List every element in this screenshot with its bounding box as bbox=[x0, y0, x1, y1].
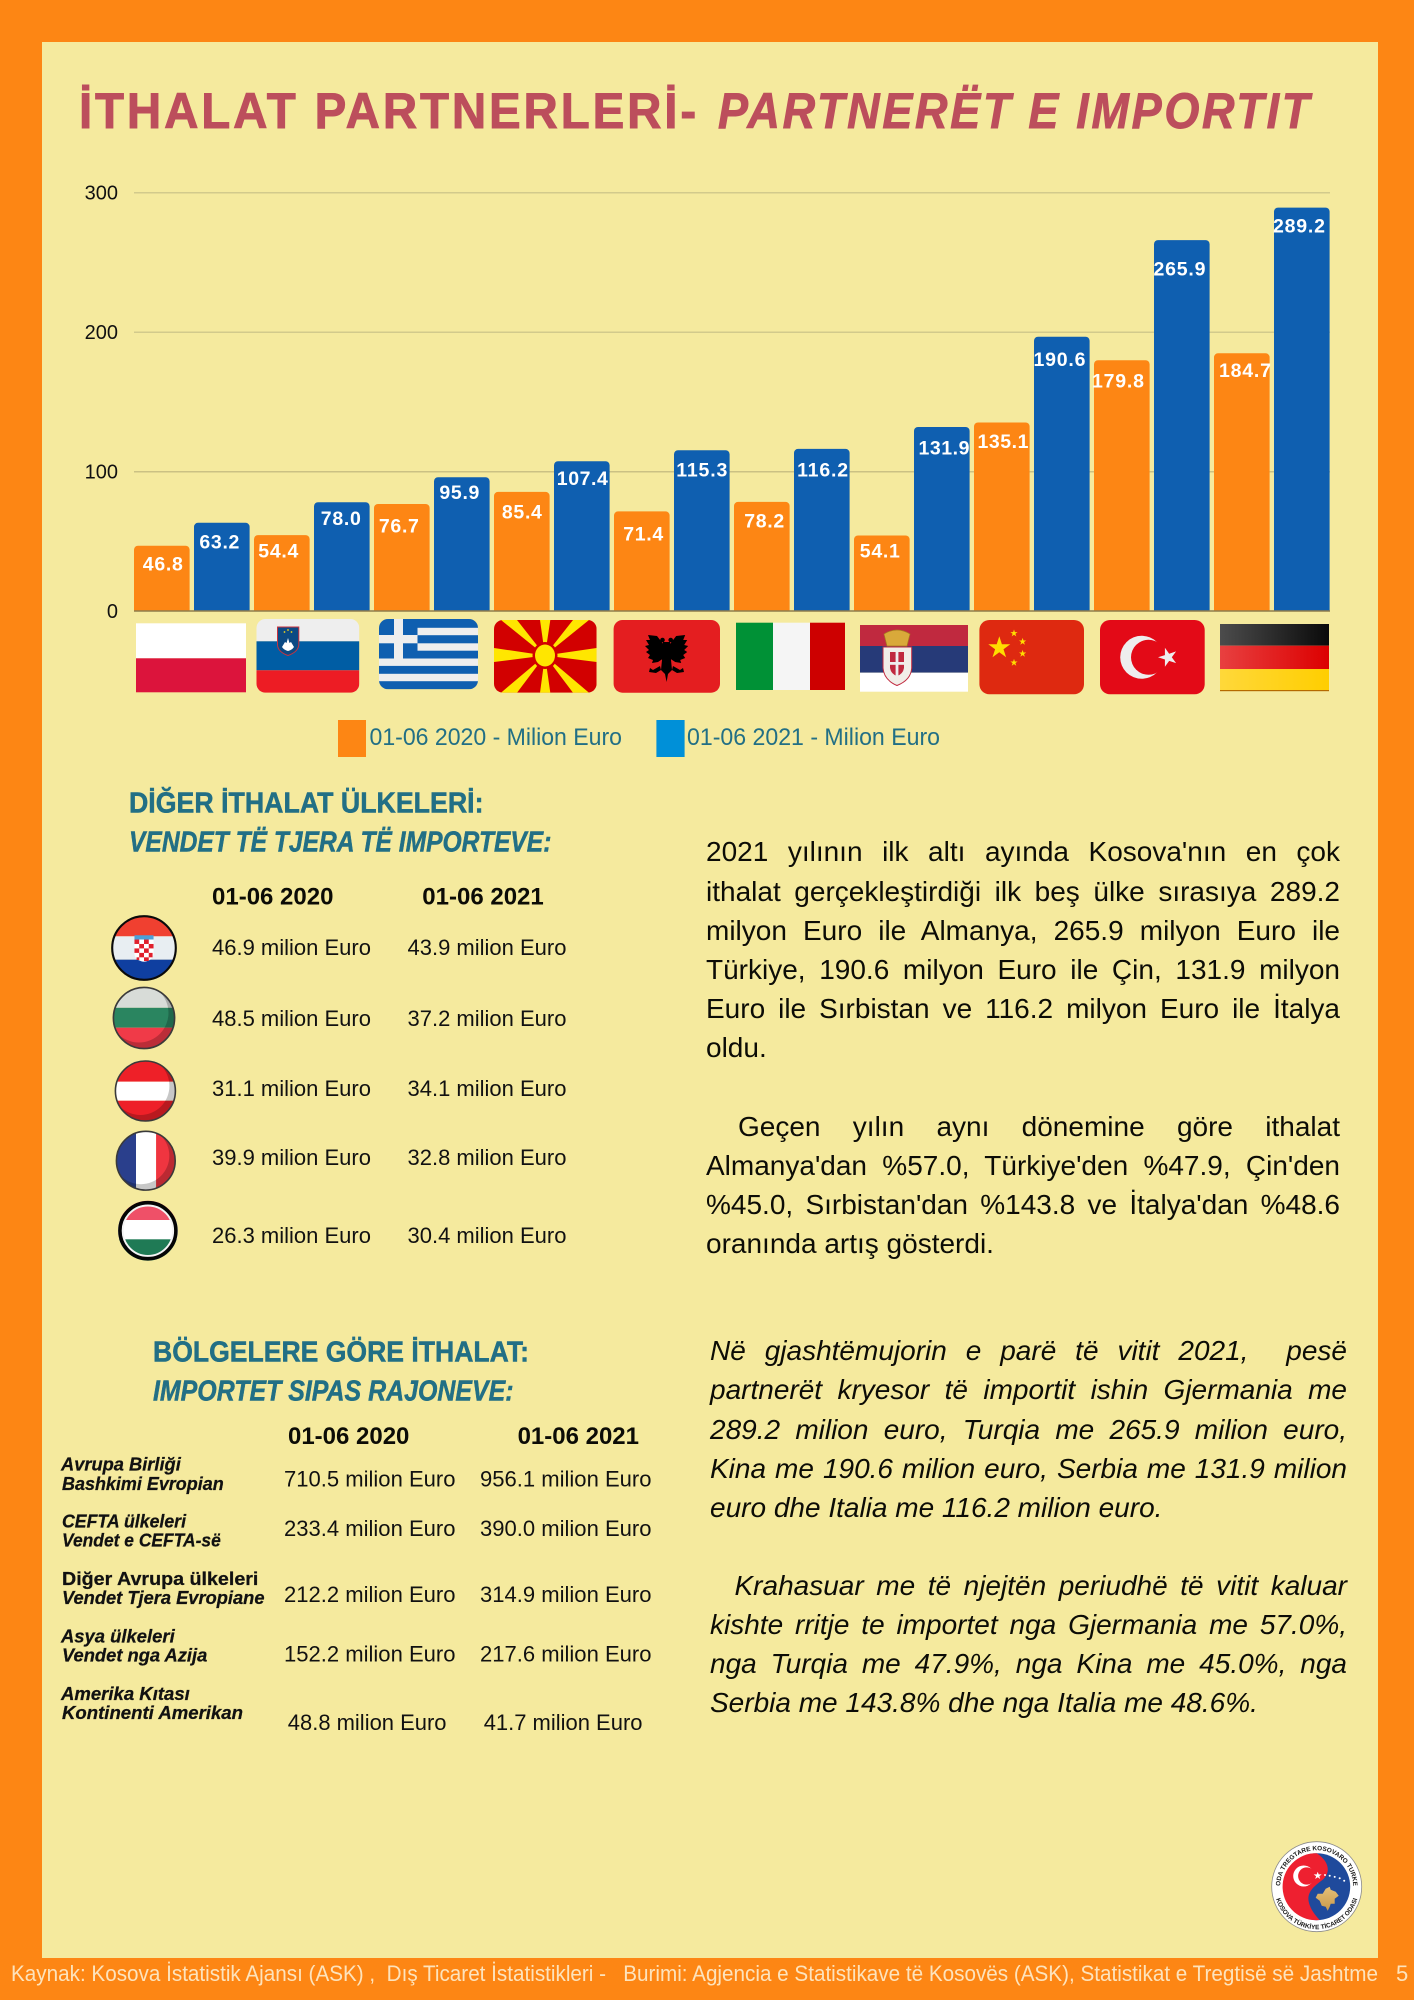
y axis labels: 200 bbox=[85, 322, 118, 344]
icon: chamber of commerce logo: ODA TREGTARE KOSOVARO TURKE bbox=[1276, 1846, 1358, 1886]
icon: flag Serbia bbox=[860, 625, 968, 692]
legend bbox=[338, 720, 940, 757]
row: Hungary bbox=[212, 1223, 566, 1248]
row: Austria bbox=[212, 1076, 566, 1101]
icon: flag France bbox=[112, 1127, 176, 1190]
text block: Albanian summary paragraph 1: 289.2 milion euro, Turqia me 265.9 milion euro, bbox=[710, 1414, 1347, 1445]
text block: Turkish summary paragraph 2 bbox=[706, 1111, 1340, 1259]
bars and value labels: 107.4 bbox=[557, 468, 608, 490]
icon: flag Croatia bbox=[112, 916, 176, 980]
row: Americas: Kontinenti Amerikan bbox=[62, 1702, 243, 1723]
y axis labels: 100 bbox=[85, 462, 118, 484]
text block: Turkish summary paragraph 2: %45.0, Sırbistan'dan %143.8 ve İtalya'dan %48.6 bbox=[706, 1189, 1340, 1220]
y axis labels: 300 bbox=[85, 183, 118, 205]
icon: flag Bulgaria bbox=[109, 983, 175, 1049]
bars and value labels: 190.6 bbox=[1034, 349, 1086, 371]
row: European Union bbox=[60, 1454, 652, 1494]
title bbox=[79, 83, 1313, 139]
row: European Union: 710.5 milion Euro bbox=[284, 1467, 456, 1492]
text block: Albanian summary paragraph 2: kishte rritje te importet nga Gjermania me 57.0%, bbox=[710, 1609, 1347, 1640]
text block: Albanian summary paragraph 2: nga Turqia me 47.9%, nga Kina me 45.0%, nga bbox=[710, 1648, 1347, 1679]
row: Hungary: 30.4 milion Euro bbox=[408, 1223, 566, 1248]
legend item: 2021: 01-06 2021 - Milion Euro bbox=[687, 724, 940, 751]
text block: Albanian summary paragraph 2: Serbia me 143.8% dhe nga Italia me 48.6%. bbox=[710, 1687, 1258, 1718]
row: Hungary: 26.3 milion Euro bbox=[212, 1223, 371, 1248]
text block: Turkish summary paragraph 1: Euro ile Sırbistan ve 116.2 milyon Euro ile İtalya bbox=[706, 993, 1340, 1024]
table header bbox=[212, 883, 544, 910]
icon: flag Hungary bbox=[118, 1201, 178, 1261]
row: France: 39.9 milion Euro bbox=[212, 1145, 371, 1170]
icon: flag Poland bbox=[136, 623, 246, 692]
bars and value labels: 116.2 bbox=[797, 460, 848, 482]
row: Croatia: 46.9 milion Euro bbox=[212, 935, 371, 960]
table header: 01-06 2020 bbox=[212, 883, 333, 910]
bars and value labels: 71.4 bbox=[623, 524, 663, 546]
text block: Turkish summary paragraph 1: ithalat gerçekleştirdiği ilk beş ülke sırasıya 289.2 bbox=[706, 876, 1340, 907]
legend item: 2020 bbox=[338, 720, 622, 757]
icon: flag Albania bbox=[614, 620, 720, 693]
row: Americas: 41.7 milion Euro bbox=[484, 1710, 642, 1735]
title: İTHALAT PARTNERLERİ- bbox=[79, 83, 699, 139]
icon: flag Greece bbox=[379, 619, 478, 689]
row: Americas bbox=[60, 1683, 642, 1735]
heading: imports by region bbox=[153, 1336, 529, 1408]
text block: Albanian summary paragraph 1 bbox=[709, 1335, 1347, 1523]
row: Bulgaria: 48.5 milion Euro bbox=[212, 1006, 371, 1031]
y axis labels: 0 bbox=[107, 601, 118, 623]
text block: Albanian summary paragraph 1: Në gjashtëmujorin e parë të vitit 2021, pesë bbox=[710, 1335, 1347, 1366]
icon: flag China bbox=[979, 620, 1084, 694]
row: CEFTA: 233.4 milion Euro bbox=[284, 1516, 456, 1541]
bars and value labels: 115.3 bbox=[676, 460, 727, 482]
row: other European countries: 314.9 milion Euro bbox=[480, 1582, 652, 1607]
row: Croatia bbox=[212, 935, 566, 960]
table header: 01-06 2020 bbox=[288, 1423, 409, 1450]
bars and value labels: 265.9 bbox=[1154, 258, 1206, 280]
bars and value labels: 85.4 bbox=[502, 501, 542, 523]
row: other European countries bbox=[62, 1568, 652, 1608]
row: other European countries: 212.2 milion Euro bbox=[284, 1582, 456, 1607]
table: other import countries bbox=[109, 883, 566, 1261]
heading: imports by region: BÖLGELERE GÖRE İTHALAT: bbox=[153, 1336, 529, 1369]
icon: chamber of commerce logo bbox=[1271, 1841, 1362, 1932]
row: Americas: 48.8 milion Euro bbox=[288, 1710, 446, 1735]
text block: Albanian summary paragraph 1: Kina me 190.6 milion euro, Serbia me 131.9 milion bbox=[710, 1453, 1347, 1484]
row: Croatia: 43.9 milion Euro bbox=[408, 935, 566, 960]
title: PARTNERËT E IMPORTIT bbox=[718, 83, 1313, 139]
bars and value labels: 54.1 bbox=[860, 541, 900, 563]
text block: Albanian summary paragraph 1: euro dhe Italia me 116.2 milion euro. bbox=[710, 1492, 1162, 1523]
bars and value labels: 78.2 bbox=[744, 511, 784, 533]
row: CEFTA: 390.0 milion Euro bbox=[480, 1516, 652, 1541]
bars and value labels: 95.9 bbox=[439, 482, 480, 504]
row: Bulgaria: 37.2 milion Euro bbox=[408, 1006, 566, 1031]
bar chart: import partners bbox=[85, 183, 1330, 627]
row: Asian countries bbox=[60, 1626, 651, 1667]
row: France bbox=[212, 1145, 566, 1170]
row: European Union: Bashkimi Evropian bbox=[62, 1473, 224, 1494]
row: Bulgaria bbox=[212, 1006, 566, 1031]
row: Asian countries: 152.2 milion Euro bbox=[284, 1642, 456, 1667]
bars and value labels: 54.4 bbox=[258, 540, 298, 562]
icon: flag Germany bbox=[1220, 624, 1329, 691]
icon: flag North Macedonia bbox=[494, 620, 597, 693]
bars and value labels: 46.8 bbox=[143, 554, 183, 576]
icon: chamber of commerce logo: KOSOVA TÜRKİYE TİCARET ODASI bbox=[1276, 1898, 1358, 1930]
row: CEFTA bbox=[62, 1511, 652, 1551]
table header: 01-06 2021 bbox=[518, 1423, 639, 1450]
bars and value labels: 135.1 bbox=[978, 431, 1029, 453]
text block: Turkish summary paragraph 1: milyon Euro ile Almanya, 265.9 milyon Euro ile bbox=[706, 915, 1340, 946]
footer source line: 5 bbox=[1396, 1961, 1408, 1986]
bars and value labels: 289.2 bbox=[1273, 216, 1325, 238]
bars and value labels: 78.0 bbox=[321, 508, 361, 530]
row: Asian countries: Vendet nga Azija bbox=[62, 1645, 207, 1666]
row: Asian countries: 217.6 milion Euro bbox=[480, 1642, 652, 1667]
row: other European countries: Diğer Avrupa ülkeleri bbox=[62, 1568, 258, 1589]
text block: Turkish summary paragraph 2: Geçen yılın aynı dönemine göre ithalat bbox=[738, 1111, 1340, 1142]
row: Americas: Amerika Kıtası bbox=[60, 1683, 190, 1704]
row: Austria: 34.1 milion Euro bbox=[408, 1076, 566, 1101]
icon: flag Slovenia bbox=[256, 619, 359, 693]
bars and value labels bbox=[134, 208, 1330, 627]
y axis labels bbox=[85, 183, 118, 623]
bars and value labels: 76.7 bbox=[379, 516, 419, 538]
row: other European countries: Vendet Tjera Evropiane bbox=[62, 1587, 264, 1608]
text block: Turkish summary paragraph 2: Almanya'dan %57.0, Türkiye'den %47.9, Çin'den bbox=[706, 1150, 1340, 1181]
heading: other import countries: DİĞER İTHALAT ÜLKELERİ: bbox=[129, 786, 484, 820]
row: Austria: 31.1 milion Euro bbox=[212, 1076, 371, 1101]
row: CEFTA: CEFTA ülkeleri bbox=[62, 1511, 187, 1532]
row: European Union: Avrupa Birliği bbox=[60, 1454, 182, 1475]
heading: other import countries: VENDET TË TJERA TË IMPORTEVE: bbox=[129, 826, 551, 859]
row: France: 32.8 milion Euro bbox=[408, 1145, 566, 1170]
icon: flag Italy bbox=[736, 623, 845, 690]
table header: 01-06 2021 bbox=[422, 883, 544, 910]
text block: Turkish summary paragraph 1: oldu. bbox=[706, 1032, 767, 1063]
table header bbox=[288, 1423, 639, 1450]
heading: other import countries bbox=[129, 786, 551, 859]
text block: Albanian summary paragraph 2 bbox=[710, 1570, 1348, 1718]
text block: Albanian summary paragraph 2: Krahasuar me të njejtën periudhë të vitit kaluar bbox=[734, 1570, 1347, 1601]
text block: Turkish summary paragraph 1: 2021 yılının ilk altı ayında Kosova'nın en çok bbox=[706, 836, 1340, 867]
icon: flag Turkey bbox=[1100, 620, 1205, 694]
row: CEFTA: Vendet e CEFTA-së bbox=[62, 1530, 221, 1551]
heading: imports by region: IMPORTET SIPAS RAJONEVE: bbox=[153, 1376, 514, 1408]
bars and value labels: 179.8 bbox=[1092, 371, 1144, 393]
text block: Turkish summary paragraph 2: oranında artış gösterdi. bbox=[706, 1228, 994, 1259]
text block: Turkish summary paragraph 1 bbox=[706, 836, 1340, 1063]
row: Asian countries: Asya ülkeleri bbox=[60, 1626, 176, 1647]
bars and value labels: 131.9 bbox=[918, 437, 970, 459]
table: imports by region bbox=[60, 1423, 651, 1735]
icon: flag Austria bbox=[111, 1057, 175, 1122]
legend item: 2021 bbox=[656, 720, 940, 757]
row: European Union: 956.1 milion Euro bbox=[480, 1467, 652, 1492]
bars and value labels: 63.2 bbox=[199, 531, 240, 553]
bars and value labels: 184.7 bbox=[1219, 360, 1271, 382]
legend item: 2020: 01-06 2020 - Milion Euro bbox=[370, 724, 622, 751]
text block: Albanian summary paragraph 1: partnerët kryesor të importit ishin Gjermania me bbox=[710, 1374, 1347, 1405]
text block: Turkish summary paragraph 1: Türkiye, 190.6 milyon Euro ile Çin, 131.9 milyon bbox=[706, 954, 1340, 985]
